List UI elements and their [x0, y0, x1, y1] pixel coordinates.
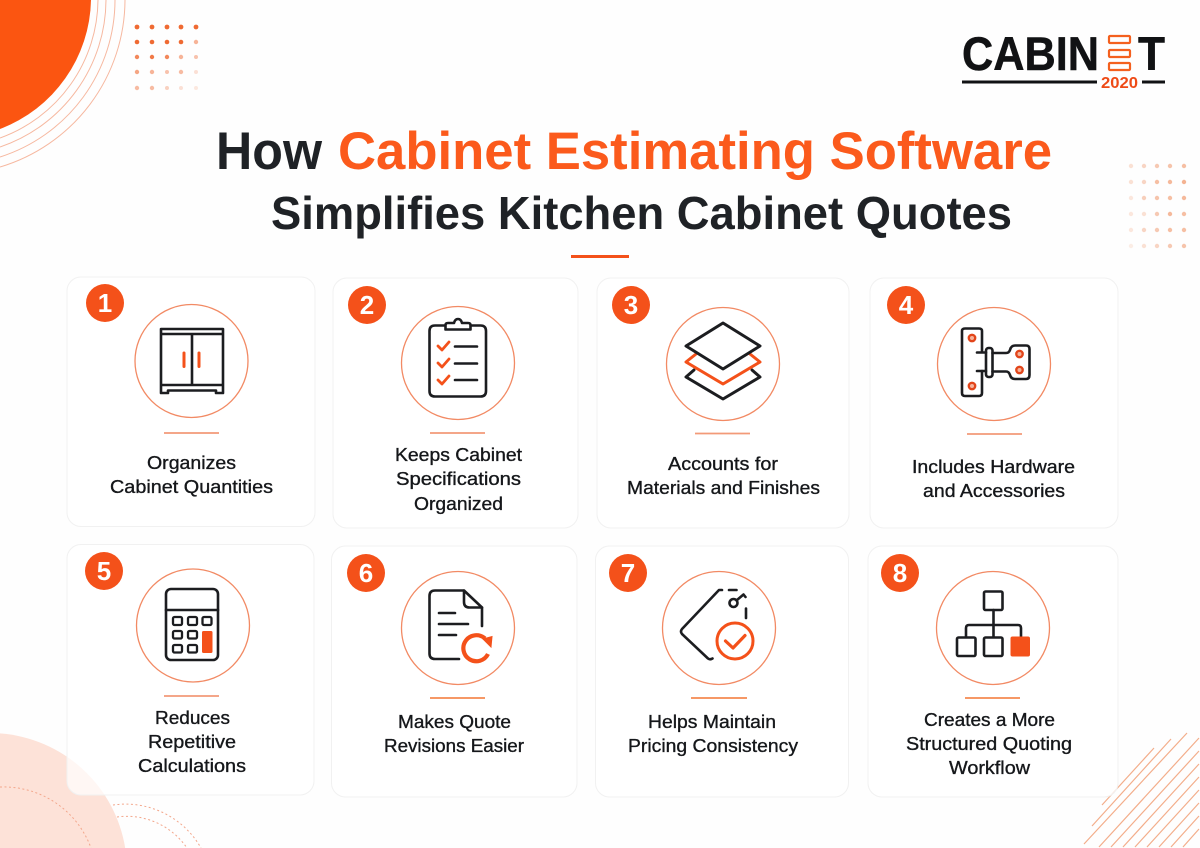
logo: Cabinet 2020: T	[1138, 27, 1165, 80]
label: Helps Maintain Pricing Consistency	[628, 711, 799, 756]
label: Reduces Repetitive Calculations: Calculations	[138, 755, 246, 776]
badge 5	[85, 552, 123, 590]
panel: card 8	[868, 546, 1118, 797]
label: Helps Maintain Pricing Consistency: Pricing Consistency	[628, 735, 799, 756]
badge 1: 1	[98, 288, 112, 318]
badge 8: 8	[893, 558, 907, 588]
label: Keeps Cabinet Specifications Organized	[395, 444, 522, 514]
badge 7	[609, 554, 647, 592]
badge 4	[887, 286, 925, 324]
badge 2	[348, 286, 386, 324]
decoration: top-left orange circle with rings	[0, 0, 125, 167]
label: Organizes Cabinet Quantities: Organizes	[147, 452, 236, 473]
icon: document with refresh	[402, 572, 514, 684]
label: Creates a More Structured Quoting Workflow: Structured Quoting	[906, 733, 1072, 754]
panel: card 6	[332, 546, 577, 797]
badge 6	[347, 554, 385, 592]
label: Organizes Cabinet Quantities	[110, 452, 273, 497]
icon: material layers	[666, 308, 780, 420]
decoration: bottom-left pale circle with dashed arcs	[0, 733, 201, 848]
label: Keeps Cabinet Specifications Organized: Organized	[414, 493, 503, 514]
badge 3	[612, 286, 650, 324]
label: Makes Quote Revisions Easier: Makes Quote	[398, 711, 511, 732]
panel: card 5	[67, 544, 314, 795]
label: Includes Hardware and Accessories: and Accessories	[923, 480, 1065, 501]
label: Accounts for Materials and Finishes: Accounts for	[668, 453, 778, 474]
panel: card 4	[870, 278, 1118, 528]
label: Includes Hardware and Accessories	[912, 456, 1075, 501]
title: Simplifies Kitchen Cabinet Quotes	[271, 187, 1012, 239]
label: Keeps Cabinet Specifications Organized: Keeps Cabinet	[395, 444, 522, 465]
label: Makes Quote Revisions Easier: Revisions Easier	[384, 735, 524, 756]
logo: Cabinet 2020: CABIN	[962, 27, 1099, 80]
label: Helps Maintain Pricing Consistency: Helps Maintain	[648, 711, 776, 732]
badge 5: 5	[97, 556, 111, 586]
label: Keeps Cabinet Specifications Organized: Specifications	[396, 468, 521, 489]
panel: card 3	[597, 278, 849, 528]
title: How	[216, 122, 323, 181]
label: Creates a More Structured Quoting Workflow: Workflow	[949, 757, 1031, 778]
decoration: bottom-right diagonal hatching	[1084, 733, 1199, 847]
logo: Cabinet 2020: 2020	[1101, 75, 1138, 92]
label: Creates a More Structured Quoting Workflow: Creates a More	[924, 709, 1055, 730]
label: Makes Quote Revisions Easier	[384, 711, 524, 756]
badge 6: 6	[359, 558, 373, 588]
panel: card 7	[596, 546, 848, 797]
label: Accounts for Materials and Finishes: Materials and Finishes	[627, 477, 820, 498]
icon: calculator	[136, 569, 250, 682]
label: Reduces Repetitive Calculations: Repetitive	[148, 731, 236, 752]
logo: Cabinet 2020	[962, 27, 1165, 92]
decoration: top-left dot grid	[135, 25, 198, 90]
panel: card 2	[333, 278, 578, 528]
badge 1	[86, 284, 124, 322]
icon: price tag with check	[662, 572, 776, 684]
label: Accounts for Materials and Finishes	[627, 453, 820, 498]
label: Reduces Repetitive Calculations: Reduces	[155, 707, 230, 728]
label: Creates a More Structured Quoting Workflow	[906, 709, 1072, 778]
icon: cabinet hinge	[938, 308, 1050, 420]
badge 2: 2	[360, 290, 374, 320]
title: Cabinet Estimating Software	[338, 122, 1052, 181]
icon: cabinet	[135, 304, 248, 418]
badge 7: 7	[621, 558, 635, 588]
title	[216, 122, 1052, 239]
panel: card 1	[67, 277, 315, 526]
label: Organizes Cabinet Quantities: Cabinet Quantities	[110, 476, 273, 497]
icon: clipboard checklist	[402, 306, 514, 420]
badge 4: 4	[899, 290, 914, 320]
title underline	[571, 255, 629, 258]
badge 3: 3	[624, 290, 638, 320]
badge 8	[881, 554, 919, 592]
label: Reduces Repetitive Calculations	[138, 707, 246, 776]
label: Includes Hardware and Accessories: Includes Hardware	[912, 456, 1075, 477]
decoration: top-right dot grid	[1129, 164, 1186, 248]
icon: workflow hierarchy	[936, 572, 1050, 684]
